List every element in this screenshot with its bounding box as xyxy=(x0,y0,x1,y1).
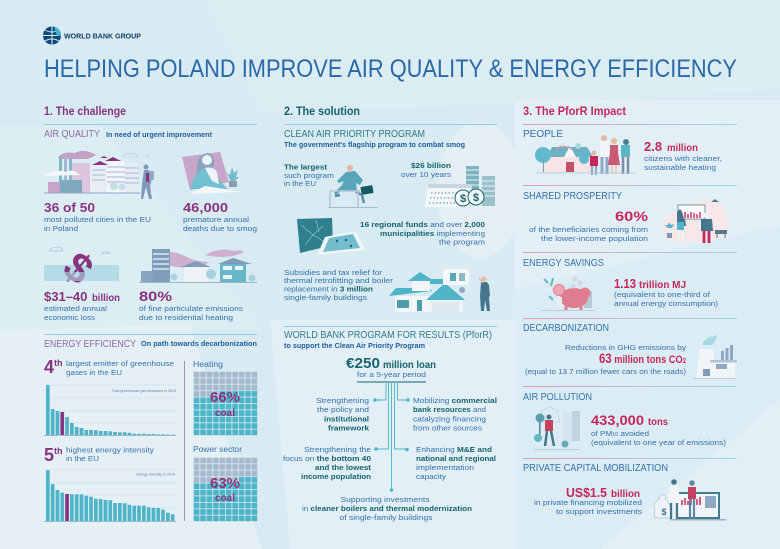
text: mobilizing finance xyxy=(413,396,497,432)
text: mobilizing finance: Mobilizing commercial xyxy=(413,396,497,405)
illustration: people at chart xyxy=(662,199,728,243)
text: largest program: in the EU xyxy=(284,179,316,188)
text: bottom 40: focus on the bottom 40 xyxy=(283,454,371,463)
text: funding: over 10 years xyxy=(401,170,451,179)
illustration: maps xyxy=(297,218,366,255)
stat: premature deaths: 46,000 xyxy=(183,200,228,215)
section: decarbonization: DECARBONIZATION xyxy=(523,322,609,334)
stat: GHG reductions: 63 million tons CO2 xyxy=(599,351,686,366)
bar chart: greenhouse gas emissions: Total greenhouse gas emissions in 2019 xyxy=(112,389,176,393)
illustration: man walking xyxy=(534,407,580,450)
stat: polluted cities xyxy=(44,200,151,233)
text: regional funds xyxy=(360,220,485,246)
text: policy framework xyxy=(316,396,369,432)
stat: economic loss: economic loss xyxy=(44,313,95,322)
heading: the challenge: 1. The challenge xyxy=(44,104,126,118)
connector lines xyxy=(373,382,410,492)
section: energy savings: ENERGY SAVINGS xyxy=(523,257,604,269)
heading: air quality: AIR QUALITY xyxy=(44,128,100,140)
stat: PM10: tons xyxy=(648,417,668,428)
stat: 5th highest energy intensity: 5 xyxy=(44,445,54,465)
stat: economic loss: $31–40 xyxy=(44,289,87,304)
loan headline: million loan xyxy=(383,360,436,371)
stat: fine particulate emissions: of fine particulate emissions xyxy=(139,304,243,313)
stat: citizens: citizens with cleaner, xyxy=(644,154,722,163)
bar chart: energy intensity xyxy=(44,470,176,522)
illustration: sinking dollar xyxy=(44,242,119,293)
illustration: businessman hurdling xyxy=(328,165,378,208)
illustration: investors and laptop: $ xyxy=(661,507,667,517)
text: subsidies: single-family buildings xyxy=(284,293,367,302)
waffle chart: power sector: 63% xyxy=(210,475,240,492)
illustration: calendar and coins: $ xyxy=(460,193,466,205)
stat: 5th highest energy intensity: in the EU xyxy=(66,454,99,463)
text: funding: $26 billion xyxy=(411,161,451,170)
bar chart: energy intensity: Energy intensity in 2019 xyxy=(137,472,175,476)
text: subsidies xyxy=(284,268,394,302)
text: M&E capacity: implementation xyxy=(416,463,474,472)
stat: fine particulate emissions: 80% xyxy=(139,288,173,304)
heading: world bank program: WORLD BANK PROGRAM FOR RESULTS (PforR) xyxy=(284,329,492,341)
stat: fine particulate emissions: due to residential heating xyxy=(139,313,233,322)
text: cleaner boilers: in cleaner boilers and thermal modernization xyxy=(302,504,472,513)
stat: energy: trillion MJ xyxy=(639,280,686,291)
panel: the PforR impact xyxy=(523,104,737,520)
stat: GHG reductions: (equal to 13.7 million fewer cars on the roads) xyxy=(525,367,686,376)
panel: the challenge xyxy=(44,104,257,322)
stat: 5th highest energy intensity: highest energy intensity xyxy=(66,446,154,454)
loan headline: for a 5-year period xyxy=(357,370,426,379)
section: people: PEOPLE xyxy=(523,128,563,140)
bar chart: greenhouse gas emissions xyxy=(44,385,176,436)
section: shared prosperity: SHARED PROSPERITY xyxy=(523,190,622,202)
heading: the solution: 2. The solution xyxy=(284,104,360,118)
stat: 4th largest emitter xyxy=(44,357,174,377)
panel: the solution xyxy=(284,104,497,312)
section: private capital mobilization xyxy=(523,462,726,520)
text: subsidies: replacement in 3 million xyxy=(284,284,373,294)
stat: premature deaths xyxy=(183,200,257,233)
stat: PM10: (equivalent to one year of emissions) xyxy=(591,438,726,447)
stat: private financing: US$1.5 xyxy=(566,485,607,500)
section: energy savings xyxy=(523,257,719,311)
text: policy framework: framework xyxy=(328,424,369,432)
stat: citizens xyxy=(644,139,722,172)
text: subsidies: Subsidies and tax relief for xyxy=(284,268,383,277)
stat: polluted cities: in Poland xyxy=(44,224,78,233)
section: private capital mobilization: PRIVATE CAPITAL MOBILIZATION xyxy=(523,462,668,474)
stat: beneficiaries: 60% xyxy=(615,208,649,224)
stat: energy: 1.13 xyxy=(614,276,636,291)
loan headline: €250 xyxy=(346,355,380,372)
stat: 4th largest emitter: th xyxy=(54,358,62,368)
subheading: flagship program: The government's flagship program to combat smog xyxy=(284,140,465,149)
stat: economic loss xyxy=(44,289,120,322)
illustration: polluted city xyxy=(44,151,154,199)
text: regional funds: the program xyxy=(439,238,485,246)
text: cleaner boilers: of single-family buildings xyxy=(340,513,433,522)
text: M&E capacity: national and regional xyxy=(416,454,496,463)
stat: GHG reductions xyxy=(525,343,686,376)
section: shared prosperity xyxy=(523,190,728,243)
section: people xyxy=(523,128,722,175)
illustration: calendar and coins xyxy=(425,166,495,207)
stat: 5th highest energy intensity: th xyxy=(54,446,62,456)
stat: fine particulate emissions xyxy=(139,288,243,322)
waffle chart: heating: coal xyxy=(215,408,235,419)
illustration: investors and laptop xyxy=(654,479,726,520)
section: air pollution: AIR POLLUTION xyxy=(523,391,592,403)
text: M&E capacity: Enhancing M&E and xyxy=(416,445,492,454)
text: subsidies: thermal retrofitting and boiler xyxy=(284,276,394,285)
text: mobilizing finance: from other sources xyxy=(413,424,482,432)
stat: PM10 xyxy=(591,413,726,447)
stat: 4th largest emitter: largest emitter of greenhouse xyxy=(66,359,174,368)
stat: energy: annual energy consumption) xyxy=(614,299,719,308)
subheading: decarbonization path: On path towards decarbonization xyxy=(141,339,257,348)
stat: economic loss: estimated annual xyxy=(44,304,107,313)
text: policy framework: Strengthening xyxy=(316,396,369,405)
logo: World Bank Group: WORLD BANK GROUP xyxy=(64,34,141,40)
waffle chart: power sector: coal xyxy=(215,493,235,504)
heading: impact: 3. The PforR Impact xyxy=(523,104,626,118)
waffle chart: power sector xyxy=(193,445,257,521)
stat: PM10: 433,000 xyxy=(591,413,644,428)
stat: polluted cities: most polluted cities in the EU xyxy=(44,215,151,224)
stat: beneficiaries xyxy=(529,208,649,243)
text: largest program: The largest xyxy=(284,162,327,172)
stat: polluted cities: 36 of 50 xyxy=(44,200,95,215)
subheading: urgent improvement: In need of urgent improvement xyxy=(106,130,213,139)
section: decarbonization xyxy=(523,322,737,379)
stat: 5th highest energy intensity xyxy=(44,445,154,465)
text: mobilizing finance: bank resources and xyxy=(413,405,486,414)
heading: clean air priority program: CLEAN AIR PRIORITY PROGRAM xyxy=(284,128,425,140)
text: cleaner boilers: Supporting investments xyxy=(340,495,430,504)
text: policy framework: institutional xyxy=(324,414,369,424)
stat: PM10: of PM 10 avoided xyxy=(591,429,649,438)
panel: program for results xyxy=(283,326,497,522)
illustration: residential smoke xyxy=(139,249,257,283)
text: bottom 40: Strengthening the xyxy=(304,445,371,454)
stat: 4th largest emitter: gases in the EU xyxy=(66,368,122,377)
text: bottom 40 xyxy=(283,445,372,481)
illustration: family and house xyxy=(535,135,636,175)
stat: private financing: to support investments xyxy=(556,507,642,516)
text: M&E capacity xyxy=(416,445,496,481)
waffle chart: heating: Heating xyxy=(193,360,223,369)
text: regional funds: 16 regional funds and over 2,000 xyxy=(360,220,485,229)
panel: energy efficiency xyxy=(44,334,257,522)
loan headline xyxy=(346,355,436,382)
text: largest program xyxy=(284,162,334,188)
text: bottom 40: and the lowest xyxy=(315,463,372,472)
stat: citizens: million xyxy=(667,143,698,154)
waffle chart: power sector: Power sector xyxy=(193,445,242,454)
stat: energy xyxy=(614,276,719,308)
text: funding xyxy=(401,161,451,179)
text: bottom 40: income population xyxy=(301,472,371,481)
text: largest program: such program xyxy=(284,171,334,180)
stat: beneficiaries: of the beneficiaries coming from xyxy=(529,225,648,234)
stat: energy: (equivalent to one-third of xyxy=(614,290,711,299)
text: policy framework: the policy and xyxy=(317,405,369,414)
stat: beneficiaries: the lower-income population xyxy=(541,234,648,243)
illustration: woman coughing xyxy=(182,152,241,194)
logo: World Bank Group xyxy=(43,26,141,44)
waffle chart: heating xyxy=(193,360,257,435)
stat: 4th largest emitter: 4 xyxy=(44,357,54,377)
stat: economic loss: billion xyxy=(92,293,120,304)
stat: premature deaths: premature annual xyxy=(183,215,249,224)
stat: private financing xyxy=(534,485,642,516)
stat: citizens: sustainable heating xyxy=(644,163,716,172)
text: mobilizing finance: catalyzing financing xyxy=(413,414,486,424)
stat: citizens: 2.8 xyxy=(644,139,662,154)
illustration: calendar and coins: $ xyxy=(473,192,479,204)
heading: energy efficiency: ENERGY EFFICIENCY xyxy=(44,338,136,350)
text: M&E capacity: capacity xyxy=(416,472,446,481)
illustration: factory xyxy=(693,335,737,379)
waffle chart: heating: 66% xyxy=(210,389,240,406)
text: cleaner boilers xyxy=(302,495,472,522)
text: regional funds: municipalities implementing xyxy=(380,229,485,238)
subheading: support: to support the Clean Air Priority Program xyxy=(284,341,425,350)
illustration: sinking dollar: $ xyxy=(54,242,102,293)
stat: private financing: billion xyxy=(611,489,640,500)
stat: premature deaths: deaths due to smog xyxy=(183,224,257,233)
stat: private financing: in private financing mobilized xyxy=(534,498,642,507)
illustration: piggy bank xyxy=(541,276,595,311)
section: air pollution xyxy=(523,391,726,450)
illustration: house retrofit xyxy=(389,269,490,312)
stat: GHG reductions: Reductions in GHG emissions by xyxy=(565,343,686,352)
